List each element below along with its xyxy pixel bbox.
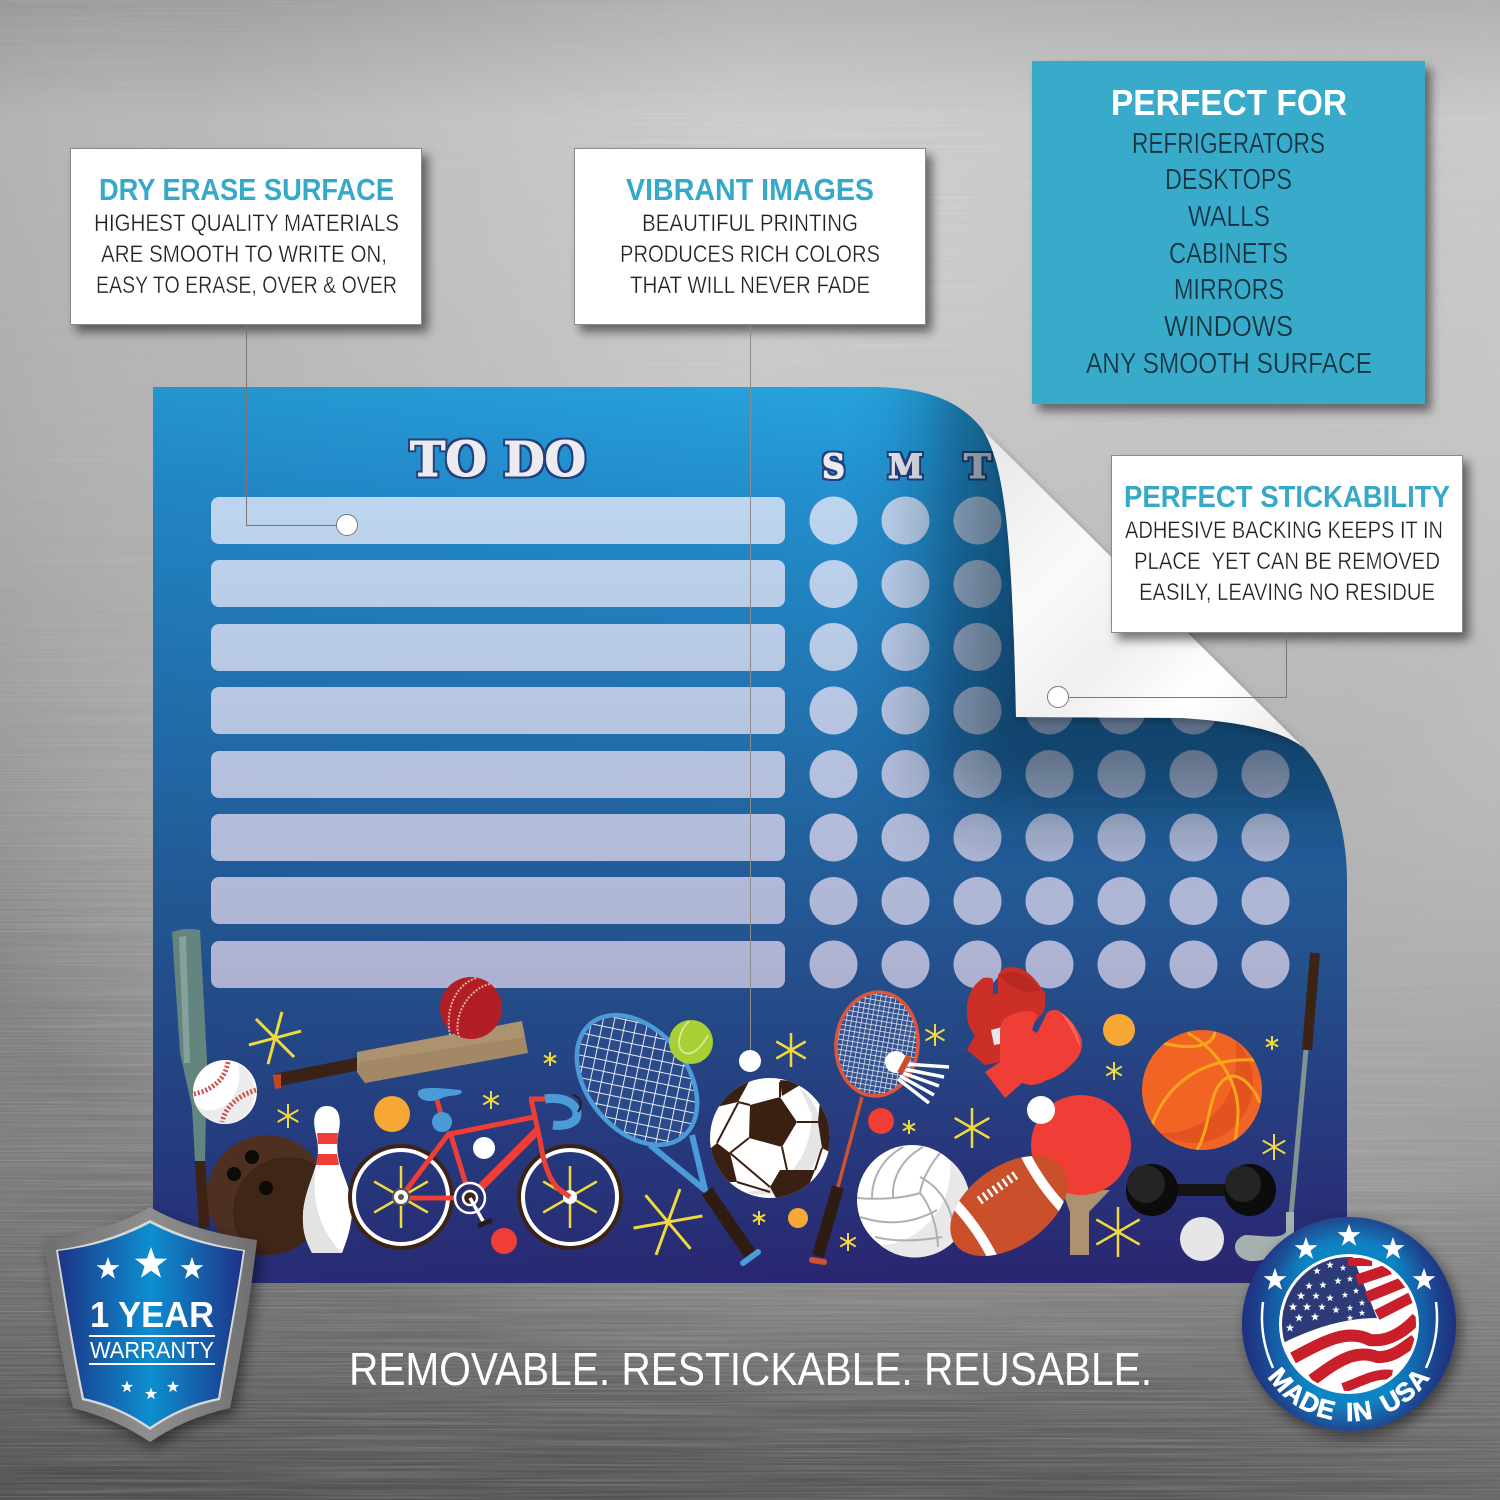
- warranty text: [89, 1294, 215, 1365]
- day checkbox circles: [810, 496, 1290, 988]
- icon: soccer ball: [710, 1078, 830, 1198]
- icon: cricket ball: [440, 977, 502, 1039]
- callout: perfect for: REFRIGERATORS: [1132, 128, 1325, 160]
- callout: perfect for: ANY SMOOTH SURFACE: [1086, 348, 1372, 380]
- icon: baseball: [193, 1060, 257, 1124]
- callout: perfect stickability: ADHESIVE BACKING KEEPS IT IN: [1125, 517, 1443, 544]
- icon: orange ball: [1103, 1014, 1135, 1046]
- usa side arcs: [1262, 1302, 1437, 1368]
- icon: american football: [950, 1156, 1068, 1256]
- icon: volleyball: [857, 1145, 970, 1258]
- icon: badminton racket: [812, 989, 922, 1262]
- sparkles: [245, 1006, 1285, 1265]
- icon: tennis ball: [669, 1020, 713, 1064]
- callout: perfect for: MIRRORS: [1174, 274, 1284, 306]
- icon: bowling ball: [207, 1135, 316, 1255]
- day headings: [822, 447, 991, 487]
- icon: baseball bat: [172, 929, 210, 1228]
- tagline: REMOVABLE. RESTICKABLE. REUSABLE.: [349, 1343, 1152, 1395]
- callout: perfect for: [1032, 61, 1425, 404]
- callout: dry erase surface: DRY ERASE SURFACE: [99, 172, 394, 207]
- callout: vibrant images: BEAUTIFUL PRINTING: [642, 210, 858, 237]
- icon: ping pong paddle: [1027, 1095, 1131, 1255]
- callout: vibrant images: PRODUCES RICH COLORS: [620, 241, 880, 268]
- icon: tennis racket: [552, 992, 758, 1263]
- icon: orange ball: [788, 1208, 808, 1228]
- callout: vibrant images: [574, 148, 926, 324]
- icon: dumbbell: [1126, 1164, 1276, 1216]
- callout: perfect for: CABINETS: [1169, 238, 1288, 270]
- day headings: S: [822, 447, 845, 487]
- callout: perfect for: WINDOWS: [1164, 311, 1293, 343]
- icon: boxing gloves: [967, 967, 1082, 1098]
- callout: dry erase surface: HIGHEST QUALITY MATERIALS: [94, 210, 399, 237]
- callout: perfect for: DESKTOPS: [1165, 164, 1292, 196]
- callout: dry erase surface: EASY TO ERASE, OVER & OVER: [96, 272, 397, 299]
- callout: perfect stickability: PERFECT STICKABILITY: [1124, 479, 1450, 514]
- panel: to do chart board: [153, 387, 1347, 1283]
- warranty stars: [97, 1247, 203, 1399]
- icon: basketball: [1142, 1030, 1262, 1150]
- icon: red ball: [491, 1228, 517, 1254]
- day headings: T: [964, 447, 991, 487]
- flag: [1282, 1257, 1416, 1391]
- day headings: M: [888, 447, 923, 487]
- badge: made in usa: [1238, 1215, 1468, 1444]
- icon: orange ball: [374, 1096, 410, 1132]
- warranty text: 1 YEAR: [90, 1294, 214, 1335]
- heading: TO DO: TO DO: [410, 432, 586, 488]
- connector: perfect stickability: [1048, 633, 1286, 708]
- usa stars: [1264, 1224, 1435, 1290]
- icon: bowling pin: [303, 1106, 352, 1253]
- icon: golf club: [1235, 953, 1315, 1261]
- connector: dry erase surface: [246, 325, 358, 536]
- icon: shuttlecock: [885, 1051, 949, 1103]
- callout: perfect for: PERFECT FOR: [1111, 82, 1347, 123]
- callout: perfect stickability: PLACE YET CAN BE REMOVED: [1134, 548, 1440, 575]
- icon: bicycle: [350, 1088, 621, 1248]
- connector: vibrant images: [739, 325, 761, 1072]
- icon: golf ball: [1180, 1217, 1224, 1261]
- curl shading: [882, 388, 1345, 862]
- callout: dry erase surface: [70, 148, 422, 324]
- made in usa text: MADE IN USA: [1268, 1366, 1430, 1422]
- icon: cricket bat: [273, 1021, 528, 1089]
- callout: dry erase surface: ARE SMOOTH TO WRITE ON,: [101, 241, 387, 268]
- callout: vibrant images: VIBRANT IMAGES: [626, 172, 874, 207]
- callout: vibrant images: THAT WILL NEVER FADE: [630, 272, 870, 299]
- badge: 1 year warranty: [44, 1207, 257, 1442]
- icon: red ball: [868, 1108, 894, 1134]
- to do rows: [211, 497, 785, 988]
- flap of peeled corner: [983, 430, 1303, 747]
- callout: perfect stickability: [1112, 456, 1462, 632]
- warranty text: WARRANTY: [90, 1337, 214, 1363]
- callout: perfect for: WALLS: [1188, 201, 1270, 233]
- callout: perfect stickability: EASILY, LEAVING NO RESIDUE: [1139, 579, 1435, 606]
